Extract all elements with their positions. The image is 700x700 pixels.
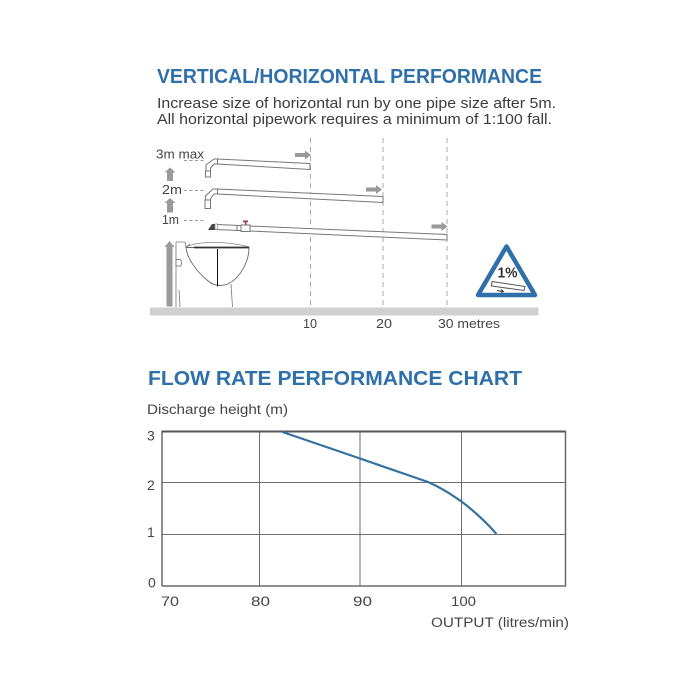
y axis title: Discharge height (m): [147, 402, 288, 417]
x axis title: OUTPUT (litres/min): [431, 615, 569, 630]
distance marker lines: [310, 138, 447, 307]
flow curve: [282, 432, 496, 534]
x axis labels: [161, 594, 476, 609]
text block: pipe sizing instructions: All horizontal pipework requires a minimum of 1:100 fall.: [157, 112, 552, 128]
x axis labels: 80: [251, 594, 270, 609]
height labels: 1m: [162, 212, 179, 227]
pipe: 3m run to 10 metres: [206, 159, 310, 177]
x axis labels: 90: [353, 594, 372, 609]
y axis labels: 2: [147, 477, 155, 493]
x axis labels: 70: [161, 594, 179, 609]
pipe: 1m run to 30 metres with valve: [208, 220, 447, 240]
height labels: [156, 148, 205, 227]
distance axis labels: 20: [376, 317, 392, 331]
x axis labels: 100: [451, 594, 476, 609]
height labels: 2m: [162, 182, 182, 197]
icon: 1% fall warning triangle: [478, 246, 535, 295]
icon: 1% fall warning triangle: 1%: [498, 266, 518, 282]
text block: pipe sizing instructions: Increase size of horizontal run by one pipe size after 5m.: [157, 96, 556, 112]
heading: flow rate performance chart: FLOW RATE PERFORMANCE CHART: [148, 367, 522, 390]
distance axis labels: 10: [303, 317, 317, 331]
heading: vertical/horizontal performance: VERTICAL/HORIZONTAL PERFORMANCE: [157, 66, 542, 88]
distance axis labels: [303, 317, 500, 331]
icon: toilet macerator: [176, 242, 249, 307]
diagram: discharge pipe runs: [150, 138, 538, 331]
pipe: 2m run to 20 metres: [205, 189, 383, 208]
distance axis labels: 30 metres: [438, 317, 500, 331]
arrows: horizontal flow arrows: [295, 150, 448, 231]
y axis labels: 3: [147, 428, 155, 444]
y axis labels: 0: [148, 574, 156, 590]
y axis labels: [147, 428, 156, 590]
chart grid: [162, 431, 566, 586]
arrows: upward height arrows: [164, 168, 176, 306]
text block: pipe sizing instructions: [157, 96, 556, 128]
floor bar: [150, 308, 538, 316]
height labels: 3m max: [156, 148, 205, 162]
line chart: flow rate: [147, 402, 569, 630]
y axis labels: 1: [147, 524, 155, 540]
